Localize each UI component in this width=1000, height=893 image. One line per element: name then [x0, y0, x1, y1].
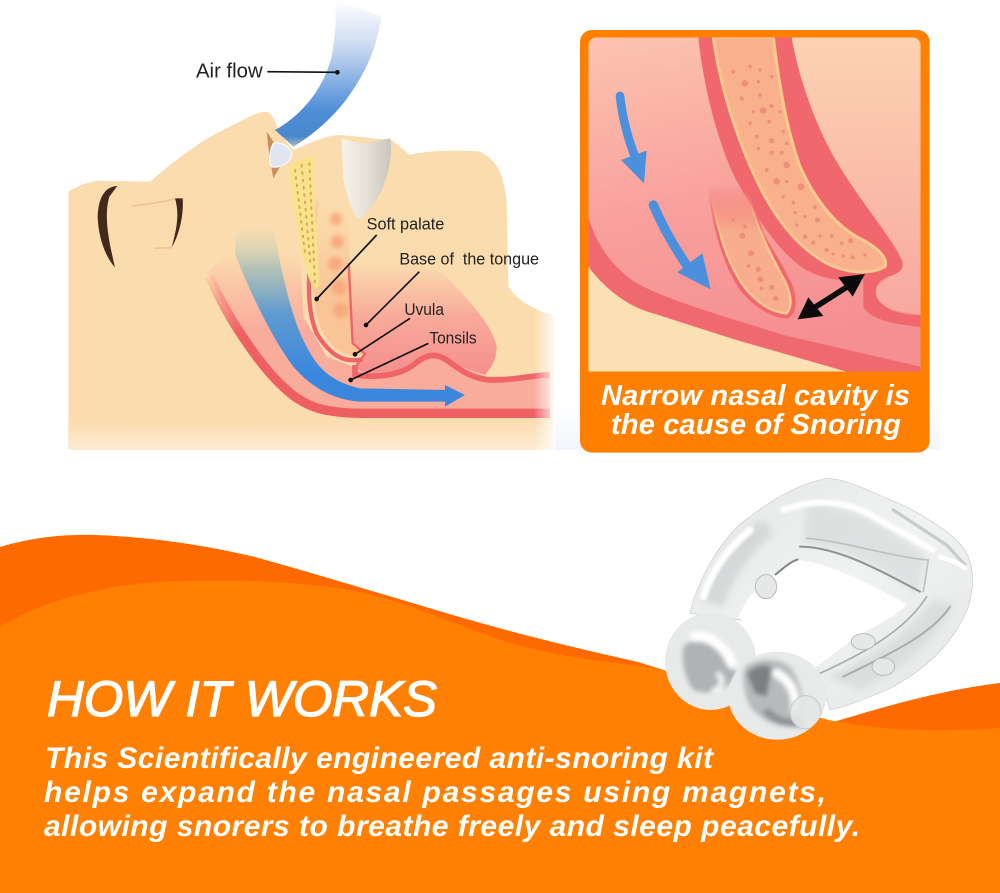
- right fade: [533, 300, 555, 451]
- clip body: [690, 478, 972, 710]
- bottom fade: [68, 420, 553, 451]
- tongue base: [350, 263, 497, 377]
- panel: narrow nasal cavity close-up: [580, 30, 930, 453]
- clip shading: [700, 502, 965, 690]
- eyebrow: [98, 186, 117, 267]
- clip opening: [738, 560, 907, 667]
- label: air flow: [196, 61, 340, 83]
- uvula inner: [712, 190, 790, 313]
- lower throat wall: [210, 277, 550, 413]
- clip highlights: [703, 502, 965, 677]
- hard palate bone: [288, 155, 319, 288]
- face silhouette: [68, 112, 553, 450]
- caption: the cause of Snoring: [611, 409, 901, 441]
- bone texture: [295, 163, 315, 283]
- uvula texture dots: [731, 218, 778, 301]
- cream skin area: [588, 267, 847, 372]
- palate texture dots: [731, 65, 867, 259]
- upper throat wall: [355, 355, 550, 380]
- label: soft palate: [314, 214, 444, 301]
- label: uvula: [353, 300, 445, 357]
- left magnet ball: [665, 614, 756, 710]
- product: magnetic nose clip: [663, 478, 972, 742]
- airway tissue: [207, 247, 550, 413]
- label: tonsils: Tonsils: [429, 328, 477, 347]
- light orange wave: [0, 581, 1000, 893]
- caption: [601, 380, 910, 441]
- tissue behind wall: [792, 37, 921, 315]
- heading: how it works: HOW IT WORKS: [47, 671, 437, 727]
- tooth: [342, 138, 391, 219]
- blue arrow lower: [653, 205, 711, 289]
- description text: allowing snorers to breathe freely and sleep peacefully.: [44, 810, 860, 843]
- cavity close-up illustration: [588, 37, 921, 372]
- closed eye: [132, 198, 183, 248]
- soft palate inner: [713, 37, 886, 272]
- uvula edge: [349, 263, 365, 365]
- soft palate red band: [698, 37, 921, 327]
- black double arrow: [798, 274, 865, 319]
- description text: [44, 742, 860, 843]
- opening edge: [775, 559, 798, 575]
- label: tonsils: [348, 328, 477, 382]
- faint blue haze behind lower panel: [553, 400, 940, 450]
- label: base of the tongue: Base of the tongue: [399, 249, 539, 268]
- soft palate tissue: [313, 207, 363, 356]
- label: air flow: Air flow: [196, 61, 263, 83]
- description text: helps expand the nasal passages using magnets,: [44, 776, 826, 809]
- label: uvula: Uvula: [404, 300, 445, 319]
- nose clip in nostril: [270, 143, 292, 167]
- orange panel frame: [580, 30, 930, 453]
- panel: anatomy illustration of a sleeping head: [68, 0, 555, 451]
- clip pegs: [755, 575, 895, 675]
- air flow tube: [275, 0, 382, 147]
- cavity background: [588, 37, 921, 372]
- caption: Narrow nasal cavity is: [601, 380, 910, 412]
- tonsil bumps: [328, 213, 349, 318]
- blue airflow arrow: [235, 227, 465, 407]
- nostril: [267, 132, 280, 178]
- dark orange wave: [0, 535, 1000, 893]
- blue arrow upper: [620, 96, 647, 183]
- uvula red outline: [707, 183, 796, 318]
- lower red wall: [588, 217, 921, 372]
- right magnet ball: [727, 650, 827, 742]
- soft palate wall: [309, 197, 363, 360]
- description text: This Scientifically engineered anti-snoring kit: [45, 742, 715, 775]
- label: base of the tongue: [364, 249, 539, 327]
- label: soft palate: Soft palate: [367, 214, 444, 233]
